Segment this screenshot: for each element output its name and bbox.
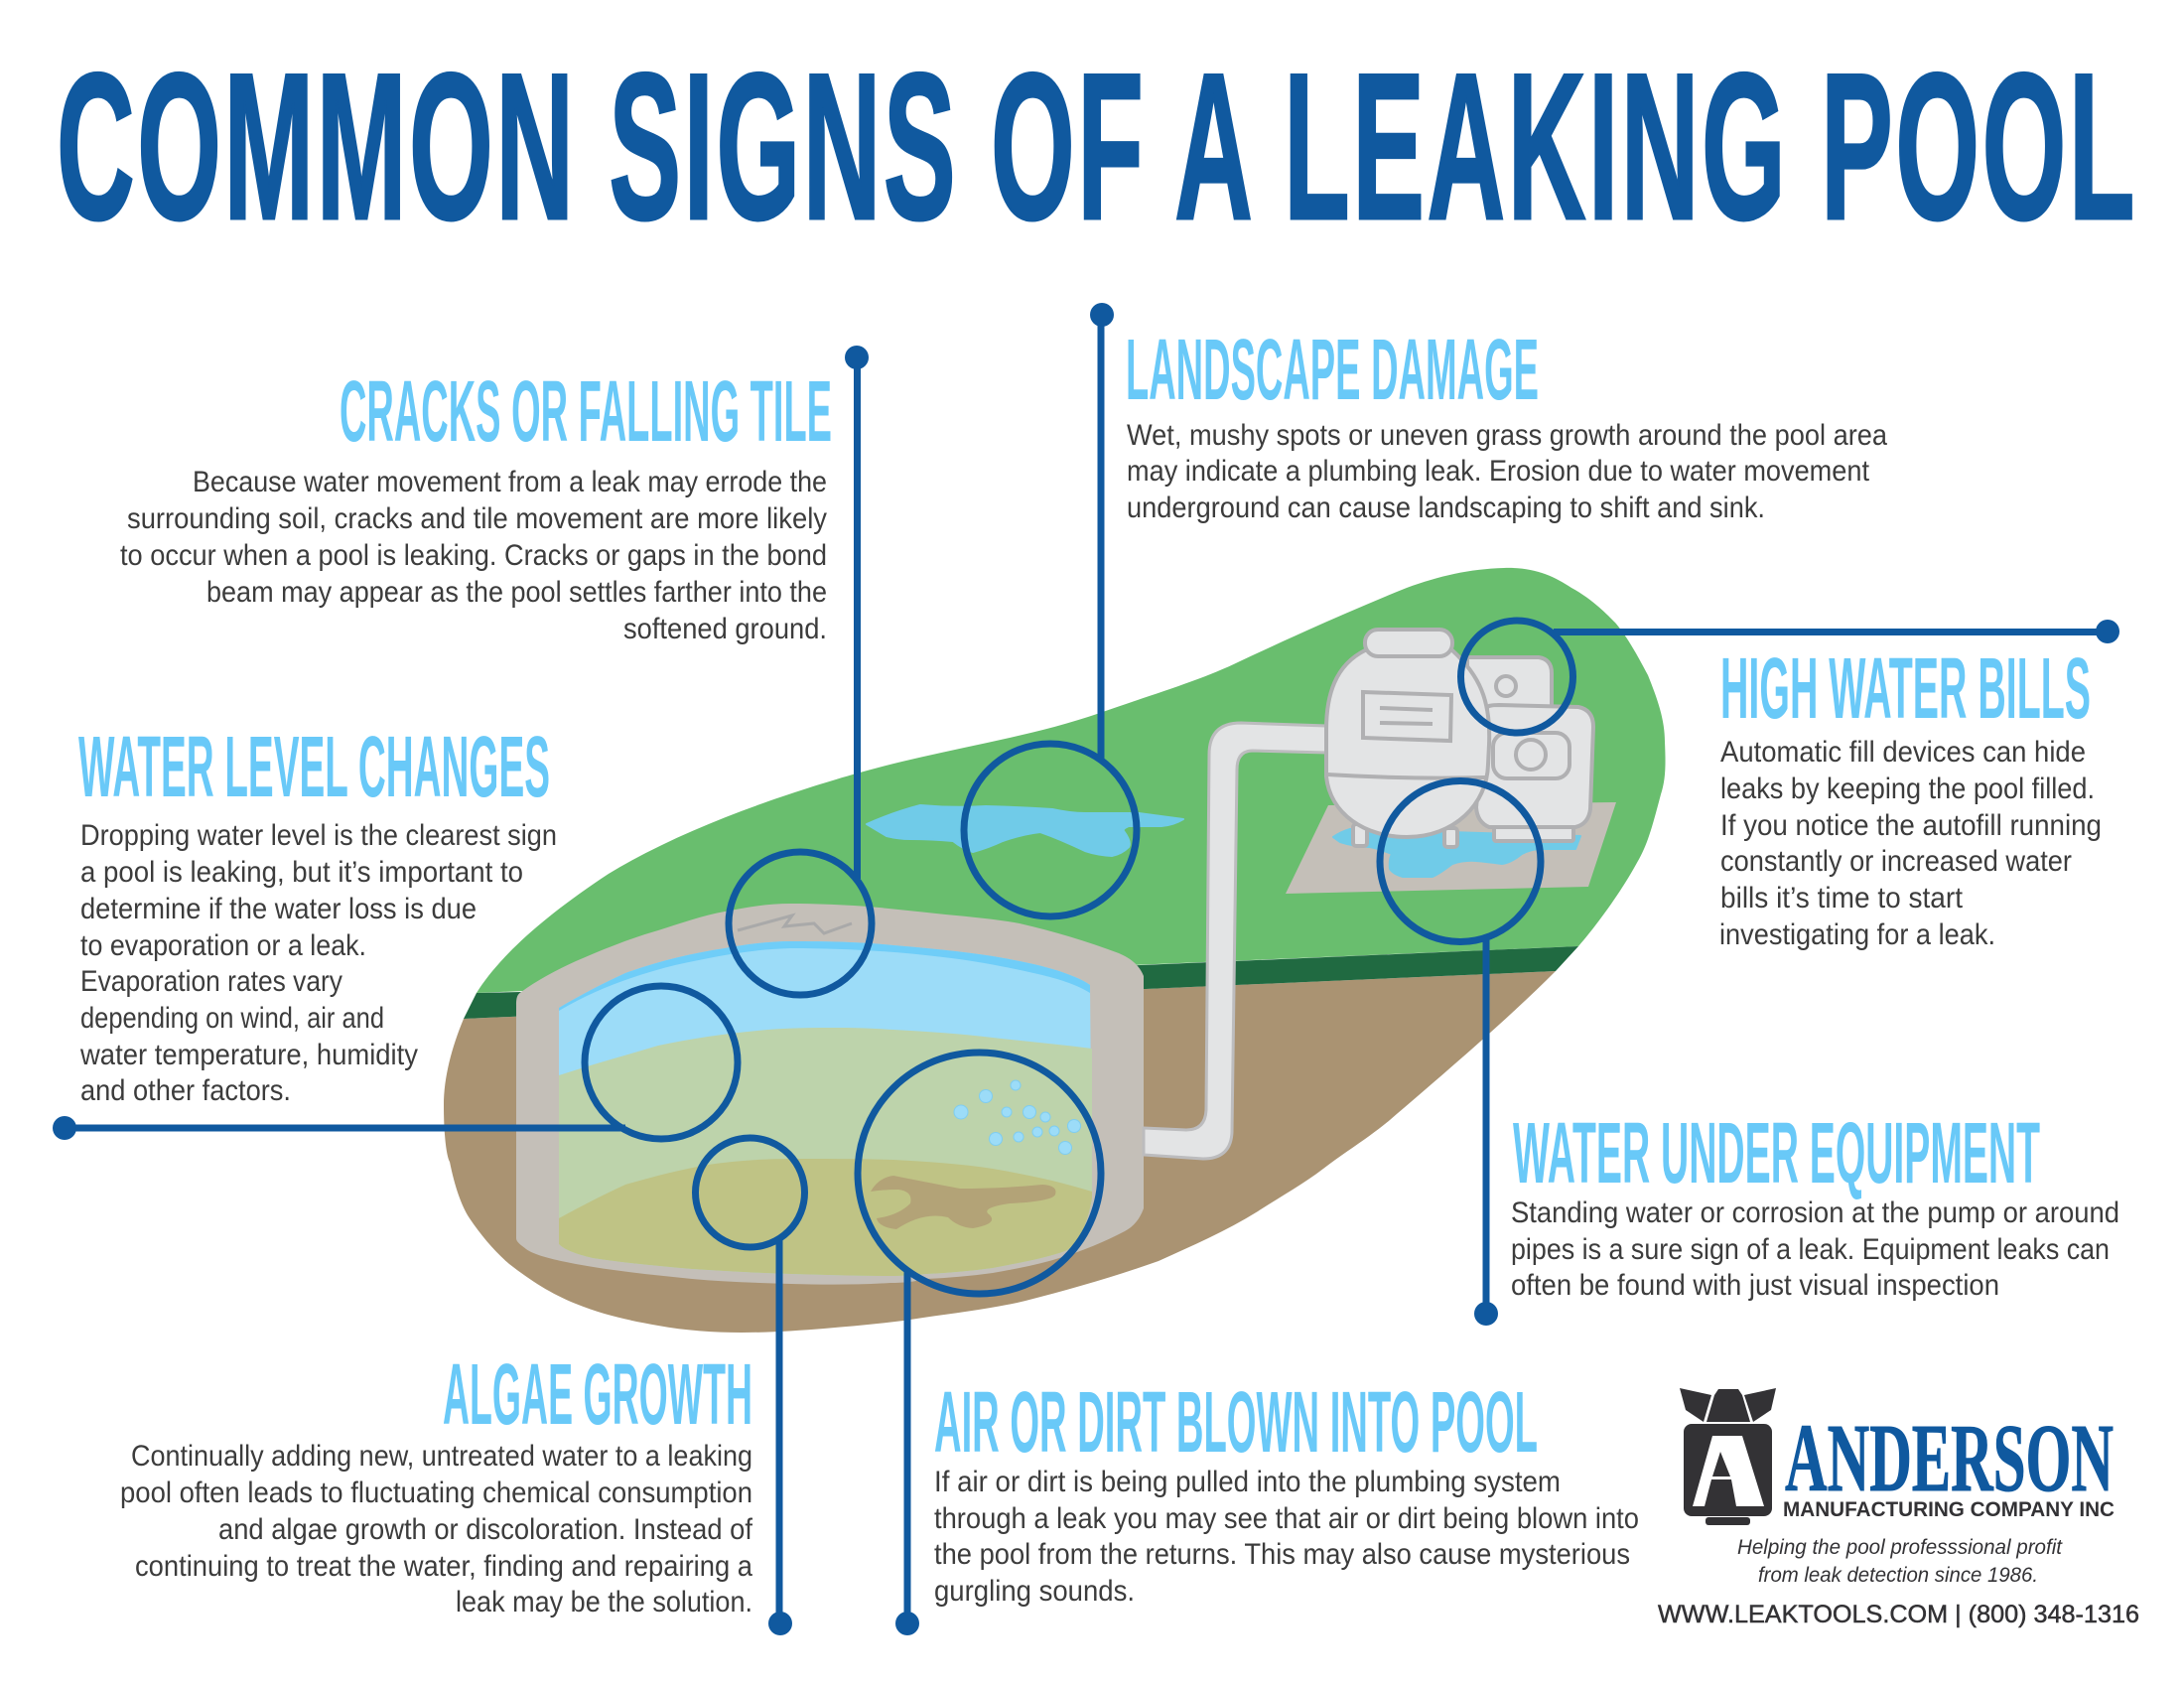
text block <box>1127 419 1887 524</box>
text: ALGAE GROWTH <box>443 1346 752 1443</box>
greenish water <box>559 1028 1092 1276</box>
text block: Automatic fill devices can hide <box>1720 736 2086 769</box>
text block: Standing water or corrosion at the pump or around <box>1511 1196 2119 1229</box>
algae floor <box>559 1159 1092 1276</box>
text block: depending on wind, air and <box>80 1002 384 1035</box>
text block: a pool is leaking, but it’s important to <box>80 856 523 889</box>
panel: water under equipment <box>1511 1105 2119 1302</box>
text block <box>934 1466 1639 1608</box>
pipe <box>1144 723 1326 1159</box>
company subtitle: MANUFACTURING COMPANY INC <box>1783 1498 2115 1521</box>
callout: cracks circle and leader <box>729 346 872 995</box>
panel: air or dirt blown into pool <box>934 1374 1639 1608</box>
text block: Dropping water level is the clearest sign <box>80 819 557 852</box>
water rim band <box>559 941 1090 1011</box>
text block: through a leak you may see that air or dirt being blown into <box>934 1502 1639 1535</box>
text block: bills it’s time to start <box>1720 882 1964 914</box>
text block: determine if the water loss is due <box>80 893 477 925</box>
text block: leak may be the solution. <box>456 1586 752 1618</box>
text block: If you notice the autofill running <box>1720 809 2102 842</box>
tagline <box>1737 1536 2063 1587</box>
text block: water temperature, humidity <box>79 1039 418 1071</box>
tagline: Helping the pool professsional profit <box>1737 1536 2063 1559</box>
pool illustration <box>444 568 1666 1333</box>
text block: beam may appear as the pool settles farther into the <box>206 576 827 609</box>
panel: landscape damage: LANDSCAPE DAMAGE <box>1126 322 1539 418</box>
text block: gurgling sounds. <box>934 1575 1135 1608</box>
panel: water level changes <box>78 719 557 1107</box>
text block <box>1511 1196 2119 1302</box>
text block: may indicate a plumbing leak. Erosion due to water movement <box>1127 455 1870 488</box>
text block: Continually adding new, untreated water to a leaking <box>131 1440 752 1473</box>
text block <box>1719 736 2102 951</box>
text block: investigating for a leak. <box>1719 918 1995 951</box>
text block: and other factors. <box>80 1074 291 1107</box>
text block: continuing to treat the water, finding and repairing a <box>135 1550 752 1583</box>
text block <box>79 819 557 1107</box>
text block: Wet, mushy spots or uneven grass growth around the pool area <box>1127 419 1887 452</box>
text block: underground can cause landscaping to shift and sink. <box>1127 492 1765 524</box>
text block: softened ground. <box>623 613 827 645</box>
text block: to evaporation or a leak. <box>80 929 366 962</box>
panel: algae growth <box>120 1346 753 1618</box>
panel: cracks or falling tile <box>120 363 832 645</box>
bubbles <box>954 1080 1080 1154</box>
panel: company logo and contact <box>1658 1388 2139 1628</box>
text block: to occur when a pool is leaking. Cracks or gaps in the bond <box>120 539 827 572</box>
callout: water level circle and leader <box>53 986 738 1140</box>
text block: If air or dirt is being pulled into the plumbing system <box>934 1466 1561 1498</box>
text block: often be found with just visual inspection <box>1511 1269 1999 1302</box>
tagline: from leak detection since 1986. <box>1758 1564 2038 1587</box>
callout: algae circle and leader <box>695 1138 804 1635</box>
equipment pad <box>1286 802 1616 894</box>
callout: air or dirt circle and leader <box>858 1053 1101 1635</box>
dark grass strip <box>464 946 1578 1019</box>
panel: landscape damage <box>1126 322 1887 524</box>
contact line: WWW.LEAKTOOLS.COM | (800) 348-1316 <box>1658 1601 2139 1628</box>
text block: the pool from the returns. This may also cause mysterious <box>934 1538 1630 1571</box>
text block: constantly or increased water <box>1720 845 2072 878</box>
text block: pool often leads to fluctuating chemical consumption <box>120 1477 752 1509</box>
equipment puddle <box>1333 829 1580 877</box>
text block <box>120 466 827 645</box>
callout: water under equipment circle and leader <box>1380 780 1541 1326</box>
text block: Because water movement from a leak may errode the <box>193 466 827 498</box>
tile crack <box>738 915 852 933</box>
icon: Anderson logo mark <box>1680 1388 1776 1525</box>
dirt stain <box>871 1176 1055 1229</box>
text block: Evaporation rates vary <box>80 965 342 998</box>
callout: landscape circle and leader <box>964 303 1137 916</box>
callout: high bills circle and leader <box>1461 620 2119 733</box>
lawn puddle <box>867 805 1183 856</box>
pump <box>1326 630 1593 847</box>
text block <box>120 1440 753 1618</box>
text block: surrounding soil, cracks and tile movement are more likely <box>127 502 827 535</box>
grass blob <box>477 568 1666 993</box>
text: WATER LEVEL CHANGES <box>78 719 550 815</box>
pool wall <box>516 904 1144 1285</box>
text block: pipes is a sure sign of a leak. Equipment leaks can <box>1511 1233 2110 1266</box>
soil <box>444 971 1556 1333</box>
text block: leaks by keeping the pool filled. <box>1720 773 2095 805</box>
panel: high water bills <box>1719 640 2102 951</box>
text: CRACKS OR FALLING TILE <box>340 363 832 460</box>
pool water upper <box>559 941 1092 1276</box>
text block: and algae growth or discoloration. Instead of <box>218 1513 753 1546</box>
